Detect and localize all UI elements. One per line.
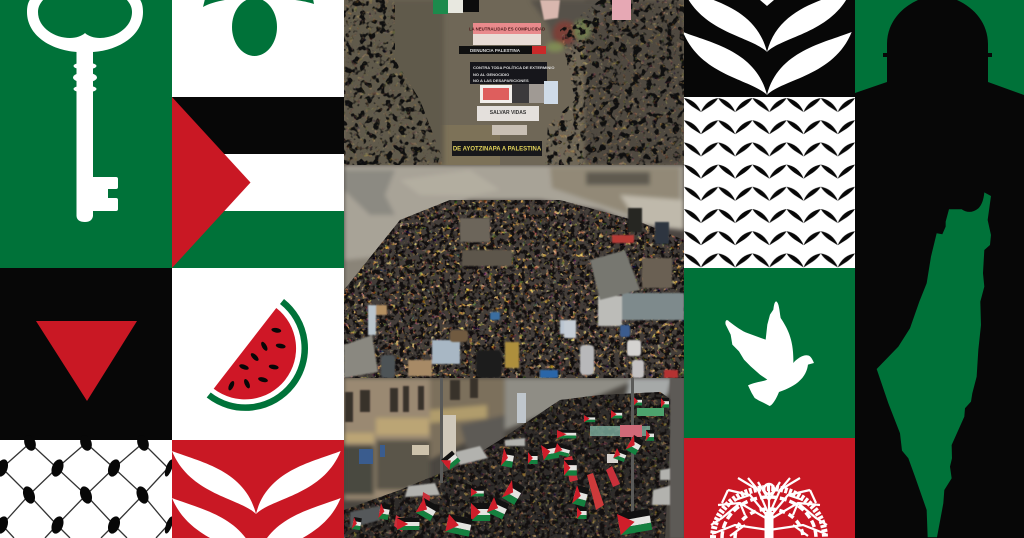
photo: crowd in Gaza rubble	[344, 165, 684, 378]
keffiyeh knots	[0, 434, 175, 535]
foreground people	[381, 312, 678, 378]
trucks and cargo	[460, 208, 684, 326]
panel: green tile with dove	[684, 268, 855, 438]
crowd right	[545, 0, 684, 165]
banners: SALVAR VIDAS	[490, 110, 527, 116]
keffiyeh net lines	[2, 443, 168, 538]
panel: black tile with white leaves	[683, 0, 855, 97]
icon: olive and leaves	[203, 0, 314, 56]
map of Palestine	[877, 192, 991, 537]
large flag at top	[433, 0, 479, 14]
banners: DENUNCIA PALESTINA	[470, 48, 521, 53]
crowd left	[344, 0, 445, 165]
street poles	[440, 378, 634, 518]
panel: Dome of the Rock silhouette and map	[855, 0, 1024, 538]
panel: keffiyeh pattern	[0, 434, 175, 538]
icon: dove of peace	[725, 301, 814, 406]
panel: white tile with watermelon	[172, 268, 344, 440]
icon: return key	[27, 0, 143, 222]
building windows	[345, 378, 478, 422]
crowd on street	[344, 392, 672, 538]
banners	[452, 23, 558, 156]
panel: white tile with black chevrons	[684, 97, 855, 268]
banners in crowd	[394, 408, 664, 532]
banners: LA NEUTRALIDAD ES COMPLICIDAD	[469, 26, 545, 32]
photo: street march with Palestinian flags	[344, 378, 684, 538]
crowd mass	[344, 200, 684, 378]
aid boxes	[344, 305, 576, 378]
panel: green tile with key	[0, 0, 172, 268]
icon: inverted red triangle	[36, 321, 137, 401]
banners: DE AYOTZINAPA A PALESTINA	[453, 146, 542, 152]
panel: Palestinian flag	[172, 97, 344, 268]
panel: black tile with red triangle	[0, 268, 172, 440]
right edge blurred wall	[670, 378, 684, 538]
storefront signs	[359, 393, 526, 464]
banners: NO AL GENOCIDIO	[473, 72, 509, 77]
photo: aerial view of protest banners on plaza	[344, 0, 684, 165]
banners: CONTRA TODA POLÍTICA DE EXTERMINIO	[473, 65, 554, 70]
rubble background	[344, 165, 684, 290]
panel: red tile with olive tree	[684, 438, 855, 538]
panel: white tile with olive	[172, 0, 344, 97]
pink mural panel	[612, 0, 631, 20]
panel: red tile with white leaves	[172, 440, 344, 538]
icon: white tree	[711, 478, 827, 538]
Palestinian flags	[352, 397, 669, 537]
green sky around dome	[855, 0, 1024, 95]
icon: watermelon slice	[209, 302, 305, 408]
plaza mural	[530, 0, 610, 52]
banners: NO A LAS DESAPARICIONES	[473, 78, 529, 83]
buildings	[344, 378, 672, 500]
cars	[350, 438, 672, 528]
